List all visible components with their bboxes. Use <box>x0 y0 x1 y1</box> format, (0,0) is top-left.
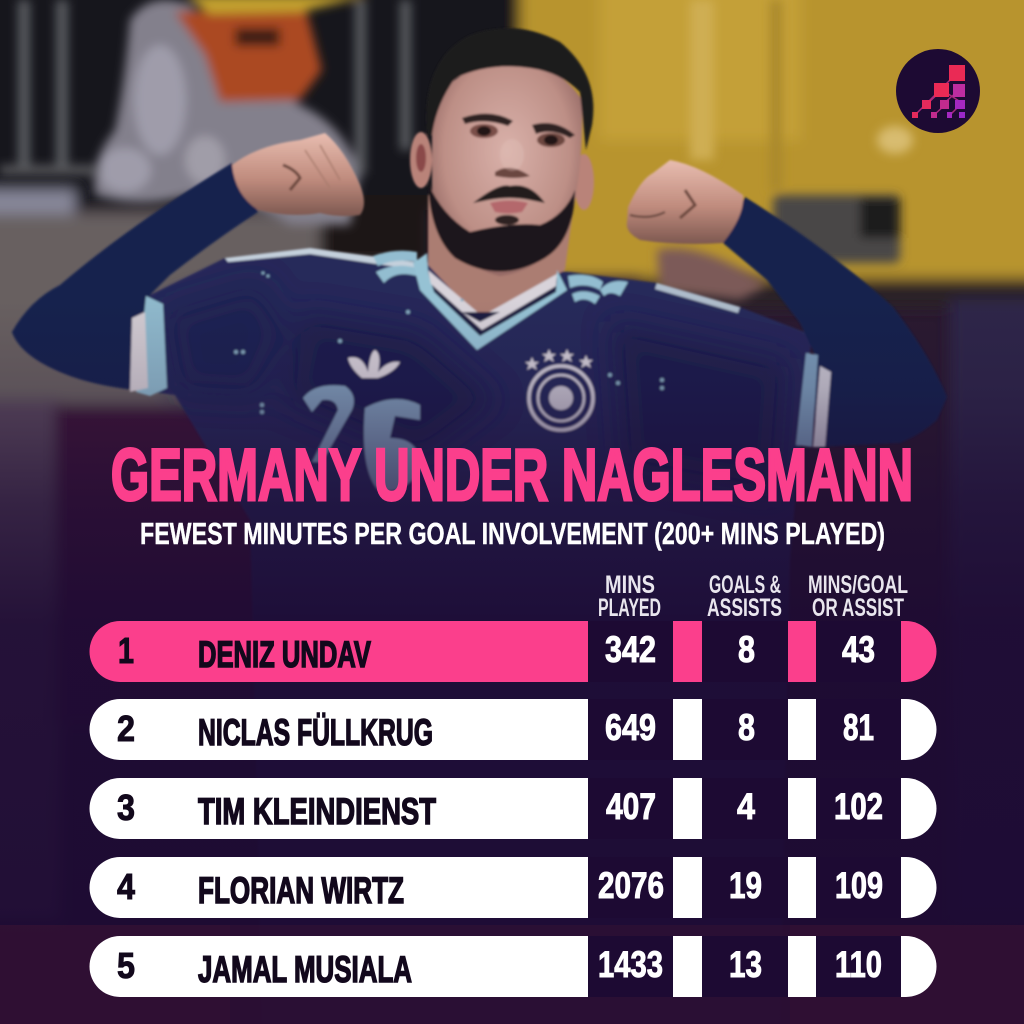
row 2: Niclas Füllkrug: NICLAS FÜLLKRUG <box>198 712 433 753</box>
row 2: Niclas Füllkrug: 649 <box>605 707 656 748</box>
row 3: Tim Kleindienst <box>89 778 936 839</box>
row 4: Florian Wirtz: 2076 <box>598 865 664 906</box>
column header: minutes per goal or assist <box>808 571 908 622</box>
row 2: Niclas Füllkrug: 2 <box>117 708 135 749</box>
beard <box>428 183 575 272</box>
row 1: Deniz Undav <box>89 621 936 682</box>
row 1: Deniz Undav: 8 <box>738 629 755 670</box>
row 1: Deniz Undav: DENIZ UNDAV <box>198 634 371 675</box>
column header: goals and assists: ASSISTS <box>707 594 782 622</box>
row 3: Tim Kleindienst: 102 <box>834 786 883 827</box>
row 2: Niclas Füllkrug: 8 <box>738 707 755 748</box>
column header: minutes per goal or assist: MINS/GOAL <box>808 571 908 599</box>
row 2: Niclas Füllkrug <box>89 699 936 760</box>
row 1: Deniz Undav: 1 <box>118 630 134 671</box>
row 5: Jamal Musiala: 1433 <box>598 944 663 985</box>
row 4: Florian Wirtz: FLORIAN WIRTZ <box>198 870 404 911</box>
row 5: Jamal Musiala: 5 <box>117 945 135 986</box>
row 5: Jamal Musiala: JAMAL MUSIALA <box>198 949 412 990</box>
row 3: Tim Kleindienst: 3 <box>117 787 135 828</box>
crest <box>529 366 593 430</box>
long sleeves <box>12 163 258 390</box>
row 4: Florian Wirtz <box>89 857 936 918</box>
column header: minutes per goal or assist: OR ASSIST <box>812 594 904 622</box>
column header: mins played <box>598 571 661 622</box>
right fist <box>627 160 743 244</box>
column header: goals and assists <box>707 571 782 622</box>
left fist <box>232 133 364 216</box>
row 3: Tim Kleindienst: 4 <box>737 786 755 827</box>
row 3: Tim Kleindienst: TIM KLEINDIENST <box>198 791 436 832</box>
row 1: Deniz Undav: 342 <box>605 629 656 670</box>
lower dark gradient overlay <box>0 300 1024 1024</box>
hair <box>426 28 593 150</box>
row 5: Jamal Musiala <box>89 936 936 997</box>
logo <box>896 49 980 133</box>
column header: goals and assists: GOALS & <box>709 571 781 599</box>
row 4: Florian Wirtz: 4 <box>117 866 135 907</box>
row 4: Florian Wirtz: 109 <box>835 865 883 906</box>
row 4: Florian Wirtz: 19 <box>729 865 762 906</box>
row 3: Tim Kleindienst: 407 <box>606 786 656 827</box>
row 1: Deniz Undav: 43 <box>842 629 875 670</box>
jersey sleeve stripes <box>136 296 167 396</box>
collar <box>413 253 567 350</box>
face <box>432 60 582 276</box>
shirt number 26 <box>303 385 354 462</box>
stars <box>525 349 593 370</box>
column header: mins played: MINS <box>605 571 655 599</box>
row 5: Jamal Musiala: 110 <box>835 944 882 985</box>
torso <box>135 248 812 1024</box>
ears <box>410 132 432 188</box>
shoulder stripes <box>373 251 417 283</box>
adidas badge <box>348 350 400 378</box>
row 2: Niclas Füllkrug: 81 <box>843 707 874 748</box>
row 5: Jamal Musiala: 13 <box>729 944 762 985</box>
column header: mins played: PLAYED <box>598 594 661 622</box>
neck <box>428 195 575 320</box>
